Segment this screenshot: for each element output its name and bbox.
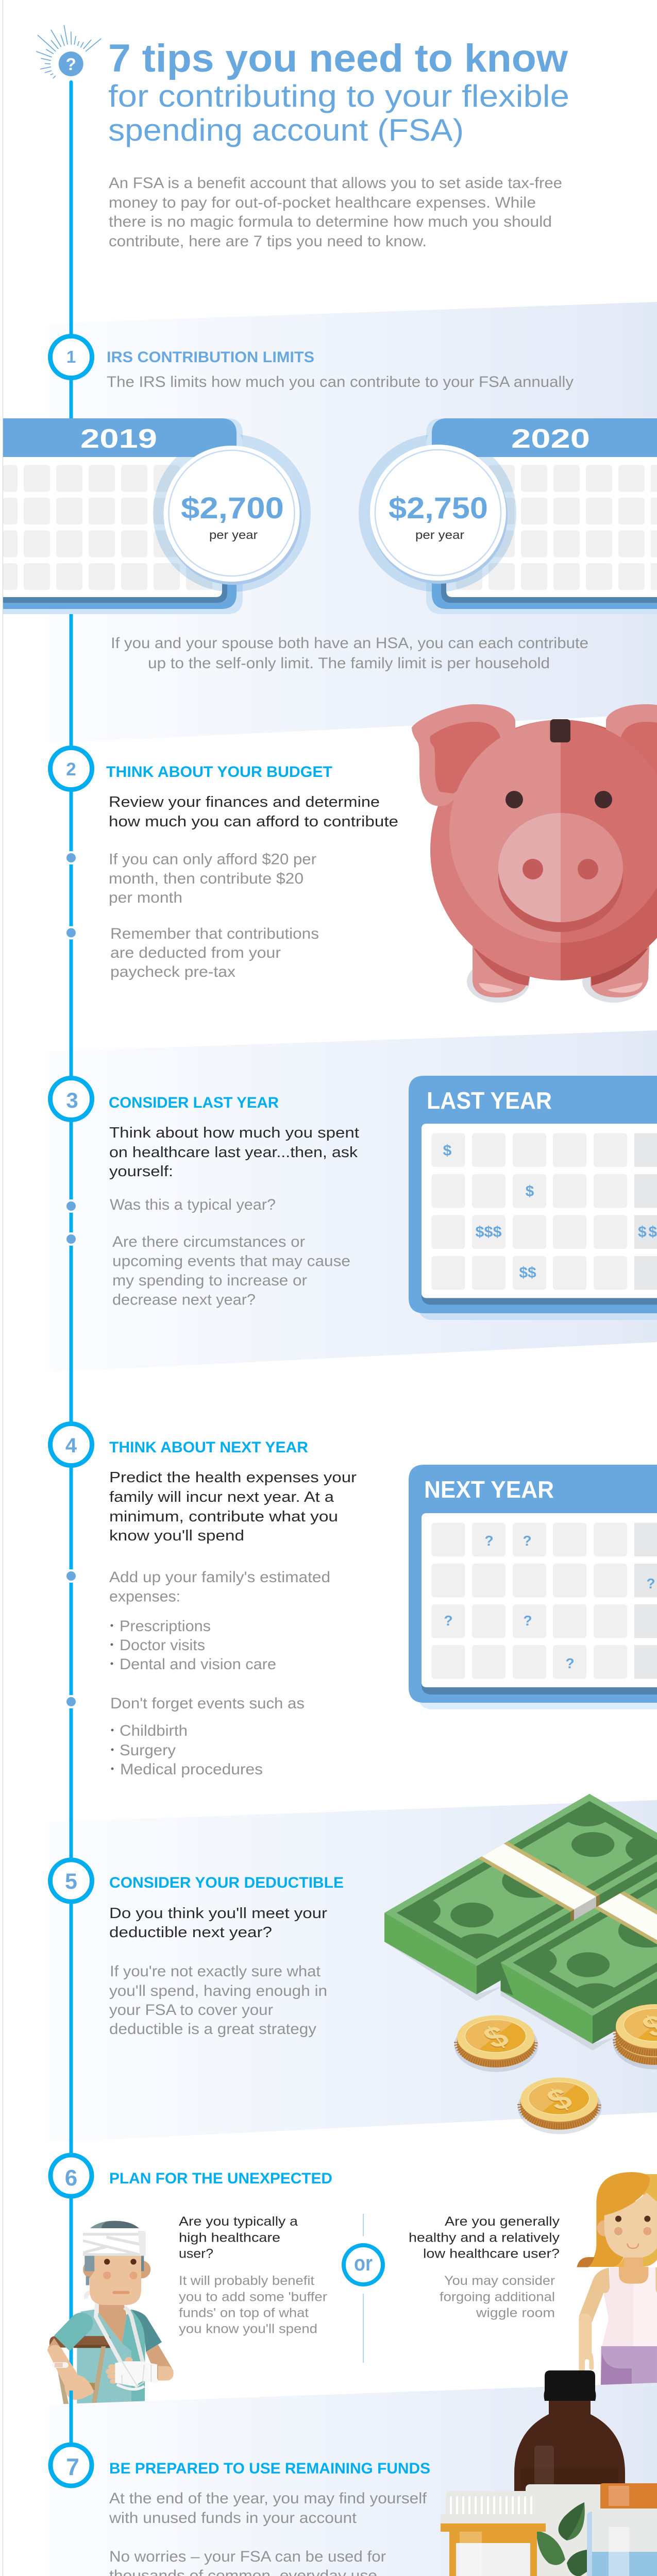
- step 2 bullet 1: [64, 851, 316, 906]
- per year 2019: per year: [209, 528, 258, 541]
- dollar marks: $$: [519, 1264, 536, 1281]
- icon: question mark with rays: [37, 25, 101, 78]
- calendar: last year: [409, 1076, 657, 1320]
- step 6 left question: you to add some 'buffer: [179, 2290, 327, 2304]
- step 5 number badge: 5: [65, 1869, 77, 1894]
- dollar marks: $: [443, 1142, 452, 1159]
- step 4 bullet 2: Surgery: [120, 1742, 176, 1759]
- liquid bottle: [587, 2483, 657, 2576]
- calendar 2019: [3, 418, 311, 614]
- step 7 text: with unused funds in your account: [109, 2510, 357, 2527]
- step 6 left question: you know you'll spend: [179, 2321, 317, 2336]
- question marks: ?: [523, 1613, 532, 1629]
- step 4 lead text: minimum, contribute what you: [109, 1509, 338, 1525]
- step 4 bullet 1: Doctor visits: [120, 1637, 205, 1654]
- step 7 text: At the end of the year, you may find yourself: [109, 2490, 427, 2507]
- amount 2019: $2,700: [181, 492, 284, 525]
- step 1 note: up to the self-only limit. The family limit is per household: [148, 655, 550, 672]
- step 4 lead text: know you'll spend: [109, 1528, 244, 1544]
- illustration: money stacks: [378, 1790, 657, 2050]
- step 6 right question: You may consider: [444, 2274, 555, 2288]
- year label 2019: 2019: [80, 424, 157, 454]
- step 3 number badge: 3: [66, 1088, 78, 1112]
- step 1 note: If you and your spouse both have an HSA, you can each contribute: [111, 635, 588, 652]
- step 3 lead text: [109, 1125, 359, 1180]
- step 6 left question: It will probably benefit: [179, 2274, 314, 2288]
- step 5 lead text: Do you think you'll meet your: [109, 1905, 327, 1922]
- step 4 bullet 1: Prescriptions: [120, 1618, 211, 1635]
- step 2 bullet 2: Remember that contributions: [110, 925, 319, 942]
- step 7 heading: BE PREPARED TO USE REMAINING FUNDS: [109, 2460, 430, 2477]
- step 2 bullet 2: are deducted from your: [110, 944, 281, 961]
- title: for contributing to your flexible: [108, 79, 569, 113]
- step 3 bullet 2: Are there circumstances or: [112, 1233, 305, 1250]
- question marks: ?: [565, 1655, 575, 1671]
- panel: step 7 background: [0, 2383, 657, 2576]
- intro text: [109, 175, 562, 250]
- step 1 description: The IRS limits how much you can contribute to your FSA annually: [107, 374, 574, 391]
- illustration: coins: [454, 2004, 657, 2134]
- step 3 lead text: Think about how much you spent: [109, 1125, 359, 1141]
- icon: question mark with rays: ?: [66, 55, 76, 74]
- dollar marks: [443, 1142, 657, 1281]
- pill bottle: [441, 2491, 546, 2576]
- step 5 number badge: [50, 1860, 92, 1902]
- title: [108, 37, 569, 147]
- step 2 bullet 2: [64, 925, 319, 980]
- step 3 bullet 2: upcoming events that may cause: [112, 1253, 350, 1269]
- step 5 lead text: [109, 1905, 327, 1941]
- question marks: ?: [646, 1575, 655, 1591]
- title: spending account (FSA): [108, 113, 464, 147]
- intro text: money to pay for out-of-pocket healthcare expenses. While: [109, 194, 536, 211]
- step 5 body text: deductible is a great strategy: [109, 2021, 316, 2038]
- step 7 number badge: [50, 2445, 92, 2486]
- step 6 left question: funds' on top of what: [179, 2306, 309, 2320]
- step 6 right question: [409, 2214, 560, 2320]
- step 4 bullet 1: [64, 1569, 330, 1673]
- step 3 heading: CONSIDER LAST YEAR: [109, 1094, 279, 1111]
- step 1 note: [111, 635, 588, 672]
- step 3 number badge: [50, 1078, 92, 1120]
- question marks: [444, 1533, 655, 1671]
- step 2 bullet 2: paycheck pre-tax: [110, 963, 235, 980]
- step 4 bullet 2: [64, 1695, 305, 1778]
- step 4 number badge: [50, 1424, 92, 1465]
- step 4 number badge: 4: [65, 1434, 77, 1457]
- step 5 lead text: deductible next year?: [109, 1924, 272, 1941]
- illustration: piggy bank: [412, 704, 657, 1003]
- calendar title: next year: NEXT YEAR: [424, 1476, 554, 1503]
- step 6 right question: Are you generally: [445, 2214, 560, 2229]
- dollar marks: $$$: [475, 1224, 502, 1241]
- step 6 left question: Are you typically a: [179, 2214, 298, 2229]
- step 5 body text: [109, 1963, 327, 2038]
- calendar title: last year: LAST YEAR: [427, 1087, 552, 1114]
- step 4 bullet 1: Dental and vision care: [120, 1656, 276, 1673]
- step 2 bullet 1: month, then contribute $20: [109, 870, 304, 887]
- calendar: next year: [409, 1465, 657, 1709]
- step 3 bullet 2: my spending to increase or: [112, 1272, 307, 1289]
- question marks: ?: [523, 1533, 532, 1549]
- step 4 lead text: family will incur next year. At a: [109, 1489, 334, 1505]
- illustration: injured man: [47, 2221, 174, 2406]
- step 2 bullet 1: If you can only afford $20 per: [109, 851, 316, 868]
- step 6 left question: [179, 2214, 327, 2336]
- step 2 lead text: [109, 794, 398, 830]
- title: 7 tips you need to know: [108, 37, 568, 80]
- step 5 heading: CONSIDER YOUR DEDUCTIBLE: [109, 1874, 344, 1891]
- step 1 number badge: 1: [66, 347, 76, 366]
- step 6 left question: user?: [179, 2246, 213, 2261]
- step 6 number badge: 6: [65, 2165, 77, 2191]
- step 5 body text: If you're not exactly sure what: [110, 1963, 321, 1980]
- step 2 lead text: how much you can afford to contribute: [109, 814, 398, 830]
- step 2 number badge: 2: [66, 759, 76, 779]
- step 2 number badge: [50, 748, 92, 789]
- step 4 bullet 1: Add up your family's estimated: [109, 1569, 330, 1586]
- step 3 bullet 2: [64, 1232, 350, 1309]
- illustration: coins: $: [476, 2019, 516, 2055]
- step 4 bullet 2: Don't forget events such as: [110, 1695, 305, 1712]
- question marks: ?: [484, 1533, 494, 1549]
- step 3 lead text: on healthcare last year...then, ask: [109, 1144, 358, 1161]
- year label 2020: 2020: [511, 424, 590, 454]
- step 7 number badge: 7: [66, 2453, 79, 2480]
- step 1 heading: IRS CONTRIBUTION LIMITS: [107, 349, 314, 366]
- step 6 left question: high healthcare: [179, 2231, 280, 2245]
- brown bottle: [514, 2370, 625, 2576]
- step 6 right question: wiggle room: [476, 2306, 555, 2320]
- step 4 bullet 2: Childbirth: [120, 1722, 188, 1739]
- intro text: An FSA is a benefit account that allows you to set aside tax-free: [109, 175, 562, 192]
- leaves: [536, 2502, 592, 2576]
- step 2 heading: THINK ABOUT YOUR BUDGET: [106, 764, 332, 781]
- illustration: coins: $: [540, 2081, 579, 2117]
- step 6 number badge: [50, 2155, 92, 2196]
- intro text: contribute, here are 7 tips you need to know.: [109, 233, 427, 250]
- step 4 bullet 2: Medical procedures: [120, 1761, 263, 1778]
- step 6 right question: forgoing additional: [440, 2290, 555, 2304]
- step 4 bullet 1: expenses:: [109, 1588, 180, 1605]
- illustration: coins: $: [540, 2082, 579, 2118]
- per year 2020: per year: [415, 528, 464, 541]
- amount 2020: $2,750: [389, 492, 488, 525]
- step 4 lead text: Predict the health expenses your: [109, 1469, 357, 1486]
- step 7 text: [109, 2490, 427, 2576]
- illustration: woman: [577, 2172, 657, 2389]
- intro text: there is no magic formula to determine how much you should: [109, 213, 552, 230]
- step 4 heading: THINK ABOUT NEXT YEAR: [109, 1439, 308, 1456]
- calendar 2020: [359, 418, 657, 614]
- or divider: [344, 2214, 383, 2363]
- step 6 heading: PLAN FOR THE UNEXPECTED: [109, 2170, 332, 2187]
- step 7 text: No worries – your FSA can be used for: [109, 2548, 386, 2565]
- question marks: ?: [444, 1613, 453, 1629]
- illustration: medicine bottles: [441, 2370, 657, 2576]
- step 5 body text: your FSA to cover your: [109, 2002, 273, 2019]
- dollar marks: $$: [638, 1224, 657, 1241]
- step 3 lead text: yourself:: [109, 1163, 173, 1180]
- step 3 bullet 1: Was this a typical year?: [110, 1196, 276, 1213]
- step 6 right question: low healthcare user?: [423, 2246, 560, 2261]
- step 4 lead text: [109, 1469, 357, 1544]
- or divider: or: [354, 2251, 373, 2275]
- step 5 body text: you'll spend, having enough in: [109, 1982, 327, 1999]
- step 2 lead text: Review your finances and determine: [109, 794, 380, 810]
- step 2 bullet 1: per month: [109, 889, 182, 906]
- step 3 bullet 2: decrease next year?: [112, 1291, 256, 1309]
- dollar marks: $: [526, 1183, 534, 1200]
- step 1 number badge: [50, 336, 92, 378]
- illustration: coins: $: [476, 2020, 516, 2056]
- step 6 right question: healthy and a relatively: [409, 2231, 560, 2245]
